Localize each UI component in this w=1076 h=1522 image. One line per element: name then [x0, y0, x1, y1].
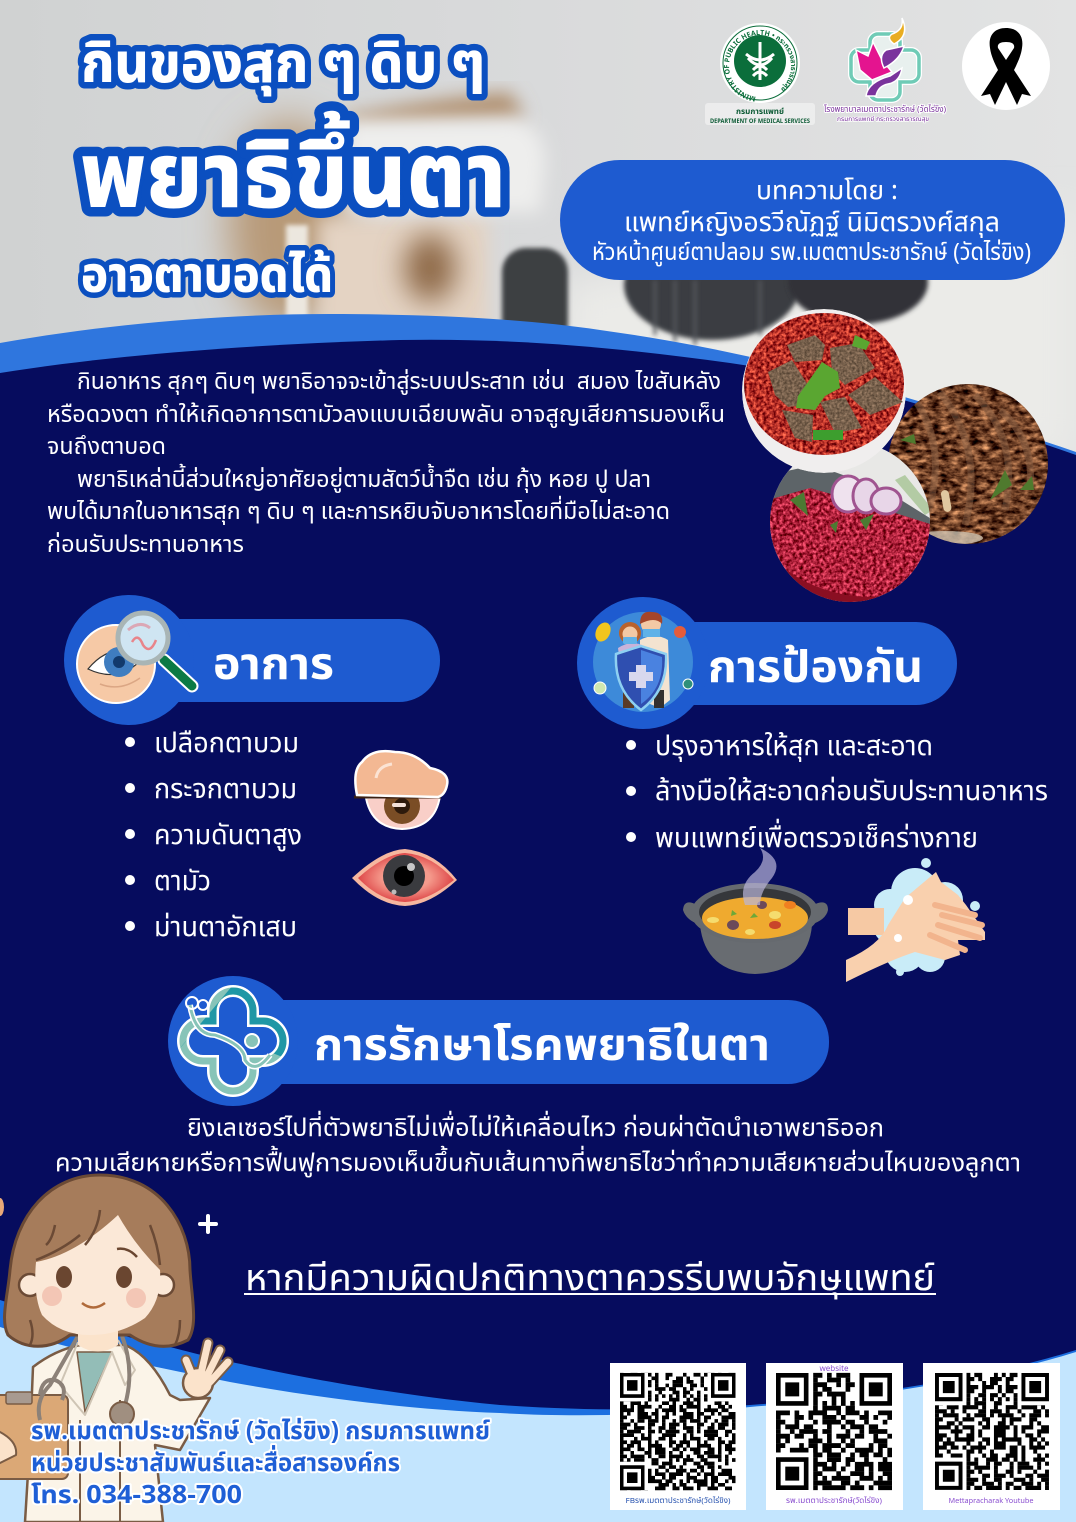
hair back — [5, 1175, 194, 1346]
heading: prevention: การป้องกัน — [708, 635, 923, 702]
logo: metta pracharak hospital: กรมการแพทย์ กระทรวงสาธารณสุข — [837, 114, 929, 124]
heading: treatment — [168, 976, 829, 1106]
face — [35, 1215, 160, 1335]
hair fringe lines — [30, 1210, 180, 1345]
list: prevention: ล้างมือให้สะอาดก่อนรับประทานอาหาร — [655, 770, 1048, 813]
icon: swollen eyelid — [354, 751, 447, 829]
doctor coat and arms — [25, 1340, 210, 1522]
eyes and brow — [56, 1249, 137, 1288]
icon: sparkle plus — [200, 1216, 216, 1232]
treatment description: ยิงเลเซอร์ไปที่ตัวพยาธิไม่เพื่อไม่ให้เคลื่อนไหว ก่อนผ่าตัดนำเอาพยาธิออก — [187, 1110, 884, 1148]
title: กินของสุก ๆ ดิบ ๆ — [81, 24, 485, 108]
QR code: website — [766, 1363, 903, 1510]
logo: metta pracharak hospital: โรงพยาบาลเมตตาประชารักษ์ (วัดไร่ขิง) — [824, 103, 946, 116]
callout: see an ophthalmologist: หากมีความผิดปกติทางตาควรรีบพบจักษุแพทย์ — [245, 1251, 935, 1307]
list: prevention: ปรุงอาหารให้สุก และสะอาด — [655, 725, 933, 768]
list: symptoms: ความดันตาสูง — [154, 814, 302, 857]
floating decorative blob — [0, 1198, 4, 1216]
logo: ministry of public health — [705, 23, 815, 126]
author pill: บทความโดย : — [756, 171, 898, 211]
footer contact: หน่วยประชาสัมพันธ์และสื่อสารองค์กร — [31, 1445, 400, 1483]
treatment description — [55, 1110, 1021, 1183]
food photo: spicy shrimp salad — [885, 380, 1055, 545]
QR code: website: รพ.เมตตาประชารักษ์(วัดไร่ขิง) — [786, 1496, 882, 1507]
title: อาจตาบอดได้ — [81, 239, 333, 315]
heading: symptoms: อาการ — [213, 632, 334, 699]
author pill — [560, 160, 1065, 280]
list: symptoms: กระจกตาบวม — [154, 768, 297, 811]
list: prevention — [626, 725, 1048, 860]
list: symptoms: เปลือกตาบวม — [154, 722, 299, 765]
footer contact: โทร. 034-388-700 — [31, 1477, 242, 1515]
stethoscope — [39, 1336, 129, 1420]
footer contact: รพ.เมตตาประชารักษ์ (วัดไร่ขิง) กรมการแพทย์ — [31, 1413, 490, 1451]
neck — [78, 1325, 118, 1352]
QR code: Facebook: FBรพ.เมตตาประชารักษ์(วัดไร่ขิง) — [626, 1496, 730, 1507]
intro paragraph — [47, 366, 725, 563]
icon: family behind shield — [592, 612, 693, 712]
author pill: แพทย์หญิงอรวีณัฏฐ์ นิมิตรวงศ์สกุล — [624, 203, 1000, 244]
intro paragraph: ก่อนรับประทานอาหาร — [47, 529, 244, 563]
author pill: หัวหน้าศูนย์ตาปลอม รพ.เมตตาประชารักษ์ (วัดไร่ขิง) — [592, 235, 1031, 271]
illustration: cartoon female doctor — [0, 1175, 228, 1522]
logo: ministry of public health: DEPARTMENT OF MEDICAL SERVICES — [710, 117, 811, 126]
QR code: Facebook — [610, 1363, 746, 1510]
footer contact — [31, 1413, 490, 1515]
list: symptoms: ม่านตาอักเสบ — [154, 906, 297, 949]
heading: symptoms — [64, 595, 440, 725]
icon: cross with stethoscope — [183, 991, 283, 1091]
title — [80, 24, 506, 315]
icon: red inflamed eye — [352, 849, 457, 906]
logo: ministry of public health: กรมการแพทย์ — [736, 106, 784, 118]
list: symptoms: ตามัว — [154, 860, 211, 903]
icon: washing hands with soap — [846, 858, 985, 982]
list: symptoms — [125, 722, 302, 949]
food photo: raw minced meat larb — [770, 448, 930, 602]
treatment description: ความเสียหายหรือการฟื้นฟูการมองเห็นขึ้นกับเส้นทางที่พยาธิไชว่าทำความเสียหายส่วนไหนของลูกตา — [55, 1145, 1021, 1183]
icon: eye under magnifier — [77, 613, 192, 703]
QR code: YouTube — [923, 1363, 1060, 1510]
icon: black mourning ribbon — [962, 22, 1050, 110]
smile — [82, 1303, 105, 1308]
ears — [19, 1274, 174, 1296]
navy main panel — [0, 340, 1076, 1400]
intro paragraph: หรือดวงตา ทำให้เกิดอาการตามัวลงแบบเฉียบพลัน อาจสูญเสียการมองเห็น — [47, 399, 725, 433]
logo: ministry of public health: MINISTRY OF PUBLIC HEALTH • กระทรวงสาธารณสุข — [724, 30, 795, 102]
bottom wave band — [0, 1300, 1076, 1522]
QR code: YouTube: Mettapracharak Youtube — [948, 1496, 1034, 1507]
clipboard — [0, 1392, 68, 1479]
background photo: eye examination — [0, 0, 1076, 460]
heading: treatment: การรักษาโรคพยาธิในตา — [314, 1013, 770, 1080]
intro paragraph: กินอาหาร สุกๆ ดิบๆ พยาธิอาจจะเข้าสู่ระบบประสาท เช่น สมอง ไขสันหลัง — [77, 366, 721, 400]
top wave band — [0, 314, 1076, 470]
list: prevention: พบแพทย์เพื่อตรวจเช็คร่างกาย — [655, 817, 978, 860]
QR code: website: website — [819, 1363, 849, 1375]
bottom light panel — [0, 1327, 1076, 1522]
food photo: beef larb on a plate — [742, 309, 906, 473]
title: พยาธิขึ้นตา — [80, 110, 506, 249]
heading: prevention — [577, 597, 957, 729]
logo: metta pracharak hospital — [824, 18, 946, 124]
icon: steaming pot — [683, 848, 828, 974]
waving hand — [183, 1343, 228, 1398]
intro paragraph: พยาธิเหล่านี้ส่วนใหญ่อาศัยอยู่ตามสัตว์น้ำจืด เช่น กุ้ง หอย ปู ปลา — [77, 463, 651, 498]
intro paragraph: พบได้มากในอาหารสุก ๆ ดิบ ๆ และการหยิบจับอาหารโดยที่มือไม่สะอาด — [47, 495, 670, 530]
intro paragraph: จนถึงตาบอด — [47, 431, 166, 465]
cheeks — [42, 1286, 146, 1308]
